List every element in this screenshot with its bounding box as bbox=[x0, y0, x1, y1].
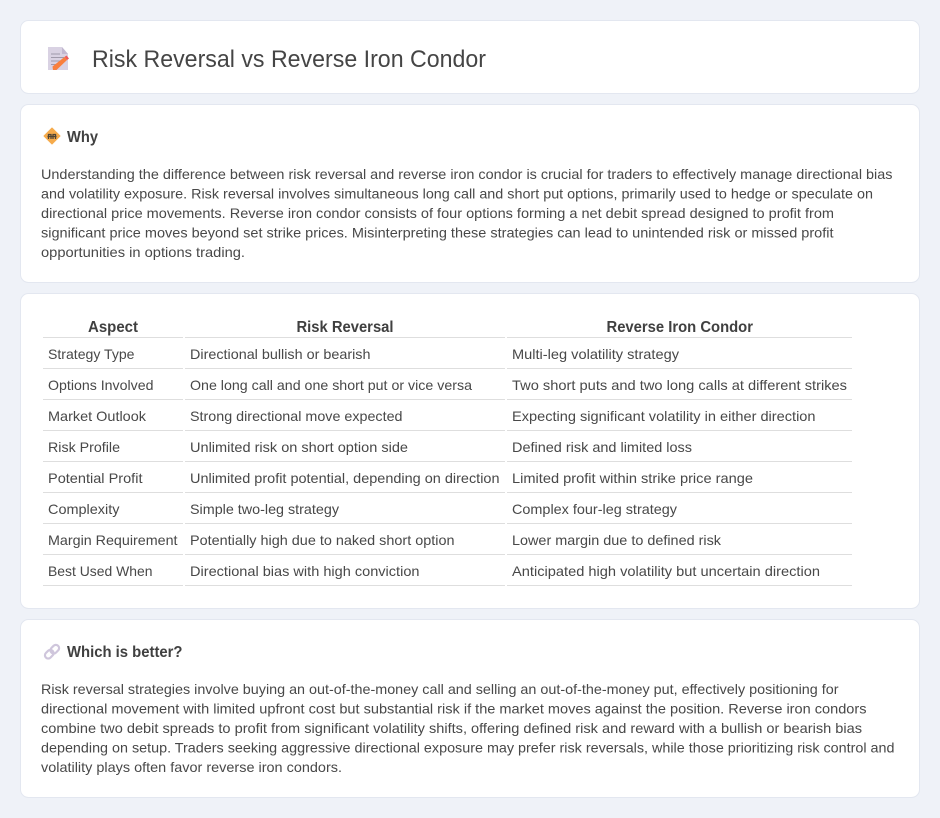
row: market outlook: Expecting significant volatility in either direction bbox=[512, 408, 816, 424]
row: market outlook: Market Outlook bbox=[48, 408, 147, 424]
text block: which is better paragraph: directional movement with limited upfront cost but substantial risk if the market moves against the position. Reverse iron condors bbox=[41, 700, 866, 716]
row: strategy type: Directional bullish or bearish bbox=[190, 346, 370, 362]
row: margin requirement bbox=[43, 532, 852, 554]
row: options involved: Options Involved bbox=[48, 377, 154, 393]
row: options involved: Two short puts and two long calls at different strikes bbox=[512, 377, 847, 393]
row: complexity bbox=[43, 501, 852, 524]
row: options involved: One long call and one short put or vice versa bbox=[190, 377, 472, 393]
text block: why paragraph: Understanding the difference between risk reversal and reverse iron condor is crucial for traders to effectively manage directional bias bbox=[41, 166, 892, 182]
row: risk profile: Defined risk and limited loss bbox=[512, 439, 692, 455]
text block: which is better paragraph bbox=[41, 681, 894, 775]
panel: why bbox=[20, 104, 920, 282]
row: strategy type: Strategy Type bbox=[48, 346, 135, 362]
row: margin requirement: Lower margin due to defined risk bbox=[512, 532, 722, 548]
panel: comparison table bbox=[20, 294, 920, 608]
table header row: Aspect bbox=[88, 319, 139, 336]
table header row: Reverse Iron Condor bbox=[606, 319, 753, 336]
row: complexity: Complexity bbox=[48, 501, 120, 517]
row: strategy type bbox=[43, 346, 852, 368]
text block: which is better paragraph: combine two debit spreads to profit from significant volatility shifts, offering defined risk and reward with a bullish or bearish bias bbox=[41, 720, 862, 736]
row: potential profit bbox=[43, 470, 852, 492]
title: Risk Reversal vs Reverse Iron Condor bbox=[92, 46, 486, 73]
text block: which is better paragraph: volatility plays often favor reverse iron condors. bbox=[41, 759, 342, 775]
row: complexity: Simple two-leg strategy bbox=[190, 501, 339, 517]
text block: which is better paragraph: Risk reversal strategies involve buying an out-of-the-money call and selling an out-of-the-money put, effectively positioning for bbox=[41, 681, 839, 697]
panel: title header bbox=[20, 20, 920, 94]
row: options involved bbox=[43, 377, 852, 400]
row: risk profile: Risk Profile bbox=[48, 439, 120, 455]
table header row bbox=[43, 319, 852, 338]
row: margin requirement: Margin Requirement bbox=[48, 532, 178, 548]
row: complexity: Complex four-leg strategy bbox=[512, 501, 677, 517]
table header row: Risk Reversal bbox=[296, 319, 394, 336]
row: strategy type: Multi-leg volatility strategy bbox=[512, 346, 679, 362]
row: best used when: Best Used When bbox=[48, 563, 152, 579]
row: potential profit: Limited profit within strike price range bbox=[512, 470, 753, 486]
row: potential profit: Unlimited profit potential, depending on direction bbox=[190, 470, 500, 486]
text block: why paragraph: directional price movements. Reverse iron condor consists of four options forming a net debit spread designed to profit from bbox=[41, 205, 834, 221]
icon: memo with pencil bbox=[48, 47, 69, 70]
text block: why paragraph: opportunities in options trading. bbox=[41, 244, 245, 260]
row: market outlook bbox=[43, 408, 852, 430]
icon: chain link bbox=[44, 644, 60, 660]
row: risk profile: Unlimited risk on short option side bbox=[190, 439, 408, 455]
row: margin requirement: Potentially high due to naked short option bbox=[190, 532, 454, 548]
row: potential profit: Potential Profit bbox=[48, 470, 143, 486]
text block: why paragraph bbox=[41, 166, 892, 260]
text block: why paragraph: significant price moves beyond set strike prices. Misinterpreting these strategies can lead to unintended risk or missed profit bbox=[41, 224, 834, 240]
row: risk profile bbox=[43, 439, 852, 462]
text block: which is better paragraph: depending on setup. Traders seeking aggressive directional exposure may prefer risk reversals, while those prioritizing risk control and bbox=[41, 740, 894, 756]
row: best used when: Anticipated high volatility but uncertain direction bbox=[512, 563, 820, 579]
text block: why paragraph: and volatility exposure. Risk reversal involves simultaneous long call and short put options, primarily used to hedge or speculate on bbox=[41, 186, 873, 202]
row: best used when bbox=[43, 563, 852, 586]
row: best used when: Directional bias with high conviction bbox=[190, 563, 420, 579]
panel: which is better bbox=[20, 620, 920, 798]
heading: why: Why bbox=[67, 129, 98, 146]
row: market outlook: Strong directional move expected bbox=[190, 408, 402, 424]
icon: warning diamond bbox=[44, 128, 60, 144]
heading: which is better: Which is better? bbox=[67, 644, 182, 661]
